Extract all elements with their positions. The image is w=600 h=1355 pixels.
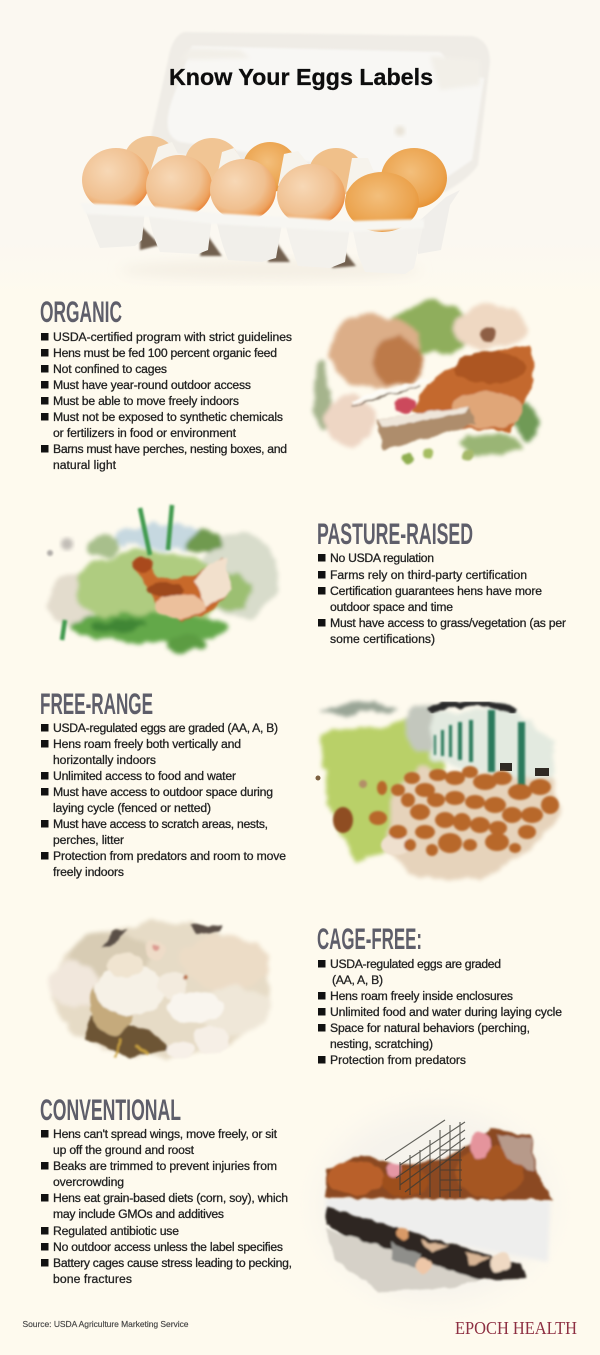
- bullet list: free-range: perches, litter: [53, 833, 124, 847]
- egg conveyor: [326, 1207, 527, 1292]
- back row eggs: [124, 136, 447, 208]
- barn doors: [500, 763, 549, 776]
- bullet list: conventional: Battery cages cause stress leading to pecking,: [53, 1256, 292, 1270]
- bullet list: free-range: USDA-regulated eggs are graded (AA, A, B): [53, 721, 278, 735]
- bullet list: cage-free: USDA-regulated eggs are graded: [330, 957, 501, 971]
- bullet list: organic: Not confined to cages: [53, 362, 167, 376]
- carton lid: [148, 32, 490, 192]
- bullet list: cage-free: Protection from predators: [330, 1053, 466, 1067]
- bullet list: free-range: [41, 721, 286, 879]
- panel: free-range: [40, 688, 559, 880]
- top background wash: [0, 0, 600, 300]
- bullet list: pasture-raised: No USDA regulation: [330, 551, 434, 565]
- bullet list: pasture-raised: [318, 551, 566, 646]
- heading: organic: ORGANIC: [40, 296, 122, 329]
- bullet list: free-range: freely indoors: [53, 865, 124, 879]
- tray rim over eggs: [80, 203, 424, 232]
- bullet list: pasture-raised: Farms rely on third-party certification: [330, 568, 527, 582]
- heading: cage-free: CAGE-FREE:: [317, 923, 422, 956]
- bullet list: conventional: bone fractures: [53, 1272, 132, 1286]
- bullet list: organic: Barns must have perches, nesting boxes, and: [53, 442, 287, 456]
- bullet list: conventional: up off the ground and roost: [53, 1143, 195, 1157]
- heading: free-range: FREE-RANGE: [40, 688, 153, 721]
- bullet list: conventional: Beaks are trimmed to prevent injuries from: [53, 1159, 277, 1173]
- source note: Source: USDA Agriculture Marketing Service: [22, 1319, 189, 1329]
- bullet list: cage-free: Space for natural behaviors (perching,: [330, 1021, 530, 1035]
- hens: [326, 1128, 552, 1200]
- bullet list: conventional: [41, 1127, 292, 1286]
- logo: Epoch Health: EPOCH HEALTH: [455, 1318, 577, 1338]
- bullet list: conventional: Hens can't spread wings, move freely, or sit: [53, 1127, 278, 1141]
- flock: [333, 766, 559, 856]
- roofline: [430, 703, 515, 712]
- panel: cage-free: [51, 922, 562, 1067]
- grass stems: [62, 505, 172, 640]
- illustration: hens at feeder: [314, 302, 539, 464]
- bullet list: free-range: Must have access to scratch areas, nests,: [53, 817, 268, 831]
- bullet list: organic: USDA-certified program with strict guidelines: [53, 330, 292, 344]
- bullet list: organic: natural light: [53, 458, 117, 472]
- bullet list: cage-free: nesting, scratching): [330, 1037, 433, 1051]
- title: Know Your Eggs Labels: [169, 64, 433, 90]
- bullet list: cage-free: Unlimited food and water during laying cycle: [330, 1005, 562, 1019]
- bullet list: pasture-raised: Certification guarantees hens have more: [330, 584, 542, 598]
- bullet list: organic: or fertilizers in food or environment: [53, 426, 237, 440]
- heading: conventional: CONVENTIONAL: [40, 1094, 181, 1127]
- carton tray: [84, 190, 460, 274]
- bullet list: free-range: Hens roam freely both vertically and: [53, 737, 241, 751]
- bullet list: organic: Must have year-round outdoor access: [53, 378, 251, 392]
- bullet list: pasture-raised: outdoor space and time: [330, 600, 453, 614]
- bullet list: pasture-raised: some certifications): [330, 632, 435, 646]
- bullet list: free-range: Unlimited access to food and water: [53, 769, 236, 783]
- hen: [131, 556, 230, 620]
- panel: organic: [40, 296, 539, 472]
- bullet list: organic: [41, 330, 292, 472]
- bullet list: cage-free: [318, 957, 562, 1067]
- bullet list: conventional: No outdoor access unless the label specifies: [53, 1240, 283, 1254]
- carton dividers: [150, 142, 374, 192]
- bullet list: conventional: Hens eat grain-based diets (corn, soy), which: [53, 1191, 288, 1205]
- bullet list: organic: Must not be exposed to synthetic chemicals: [53, 410, 283, 424]
- bullet list: conventional: Regulated antibiotic use: [53, 1224, 179, 1238]
- barn pillars: [434, 710, 525, 790]
- shadow under carton: [120, 260, 420, 280]
- illustration: open egg carton: [80, 32, 490, 280]
- bullet list: conventional: may include GMOs and additives: [53, 1207, 224, 1221]
- illustration: battery cages: [320, 1110, 552, 1300]
- white feed trough band: [326, 1198, 550, 1262]
- egg cups: [84, 206, 145, 248]
- bullet list: free-range: Must have access to outdoor space during: [53, 785, 273, 799]
- bullet list: cage-free: Hens roam freely inside enclosures: [330, 989, 513, 1003]
- bullet list: organic: Hens must be fed 100 percent organic feed: [53, 346, 277, 360]
- panel: conventional: [40, 1094, 552, 1300]
- bullet list: free-range: Protection from predators and room to move: [53, 849, 286, 863]
- bullet list: organic: Must be able to move freely indoors: [53, 394, 239, 408]
- bullet list: free-range: horizontally indoors: [53, 753, 156, 767]
- illustration: hen on pasture: [46, 505, 278, 654]
- illustration: free-range flock: [316, 703, 559, 880]
- bullet list: pasture-raised: Must have access to grass/vegetation (as per: [330, 616, 566, 630]
- bullet list: cage-free: (AA, A, B): [332, 973, 383, 987]
- illustration: crowded white hens: [51, 922, 271, 1059]
- front row eggs: [82, 148, 419, 232]
- bullet list: conventional: overcrowding: [53, 1175, 124, 1189]
- panel: pasture-raised: [46, 505, 566, 654]
- grey splashes: [61, 538, 73, 550]
- wire cage: [385, 1120, 465, 1197]
- bullet list: free-range: laying cycle (fenced or netted): [53, 801, 211, 815]
- heading: pasture-raised: PASTURE-RAISED: [317, 518, 473, 551]
